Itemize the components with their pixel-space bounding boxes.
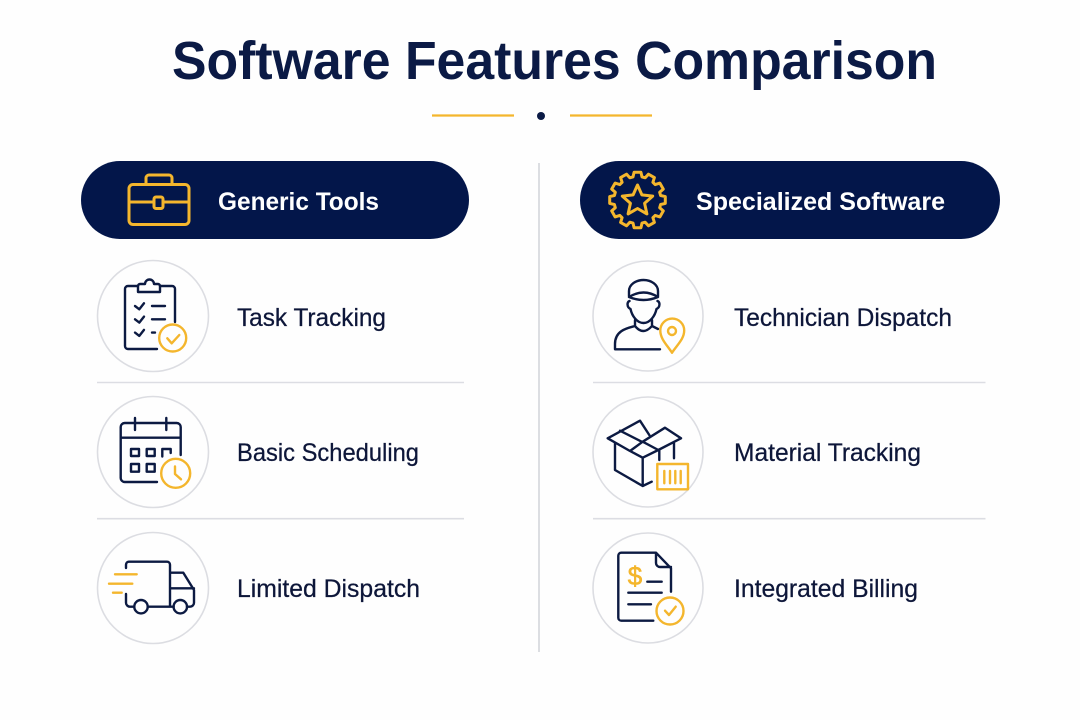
- row: integrated billing: Integrated Billing: [734, 575, 918, 603]
- header: specialized software: Specialized Software: [696, 188, 945, 216]
- row: integrated billing: [593, 533, 918, 643]
- row: task tracking: Task Tracking: [237, 304, 386, 332]
- header: specialized software: [580, 161, 1000, 239]
- row: technician dispatch: Technician Dispatch: [734, 304, 952, 332]
- icon: box with label: [608, 421, 688, 489]
- icon: clipboard: [125, 280, 186, 352]
- row: technician dispatch: [593, 261, 952, 371]
- panel: generic tools: [81, 161, 469, 644]
- icon: technician with pin: [615, 280, 684, 353]
- row: limited dispatch: Limited Dispatch: [237, 575, 420, 603]
- title: Software Features Comparison: [172, 31, 937, 91]
- icon: invoice document: $: [628, 561, 643, 591]
- row: task tracking: [98, 260, 386, 372]
- icon: truck: [109, 562, 194, 613]
- icon: gear with star: [610, 172, 665, 228]
- title ornament: [432, 112, 652, 120]
- row: limited dispatch: [98, 532, 420, 644]
- row: basic scheduling: [98, 396, 419, 508]
- row: basic scheduling: Basic Scheduling: [237, 439, 419, 467]
- header: generic tools: Generic Tools: [218, 188, 379, 216]
- icon: calendar: [121, 418, 190, 488]
- icon: briefcase: [129, 175, 189, 224]
- header: generic tools: [81, 161, 469, 239]
- row: material tracking: Material Tracking: [734, 439, 921, 467]
- icon: invoice document: [618, 553, 684, 624]
- row: material tracking: [593, 397, 921, 507]
- panel: specialized software: [580, 161, 1000, 643]
